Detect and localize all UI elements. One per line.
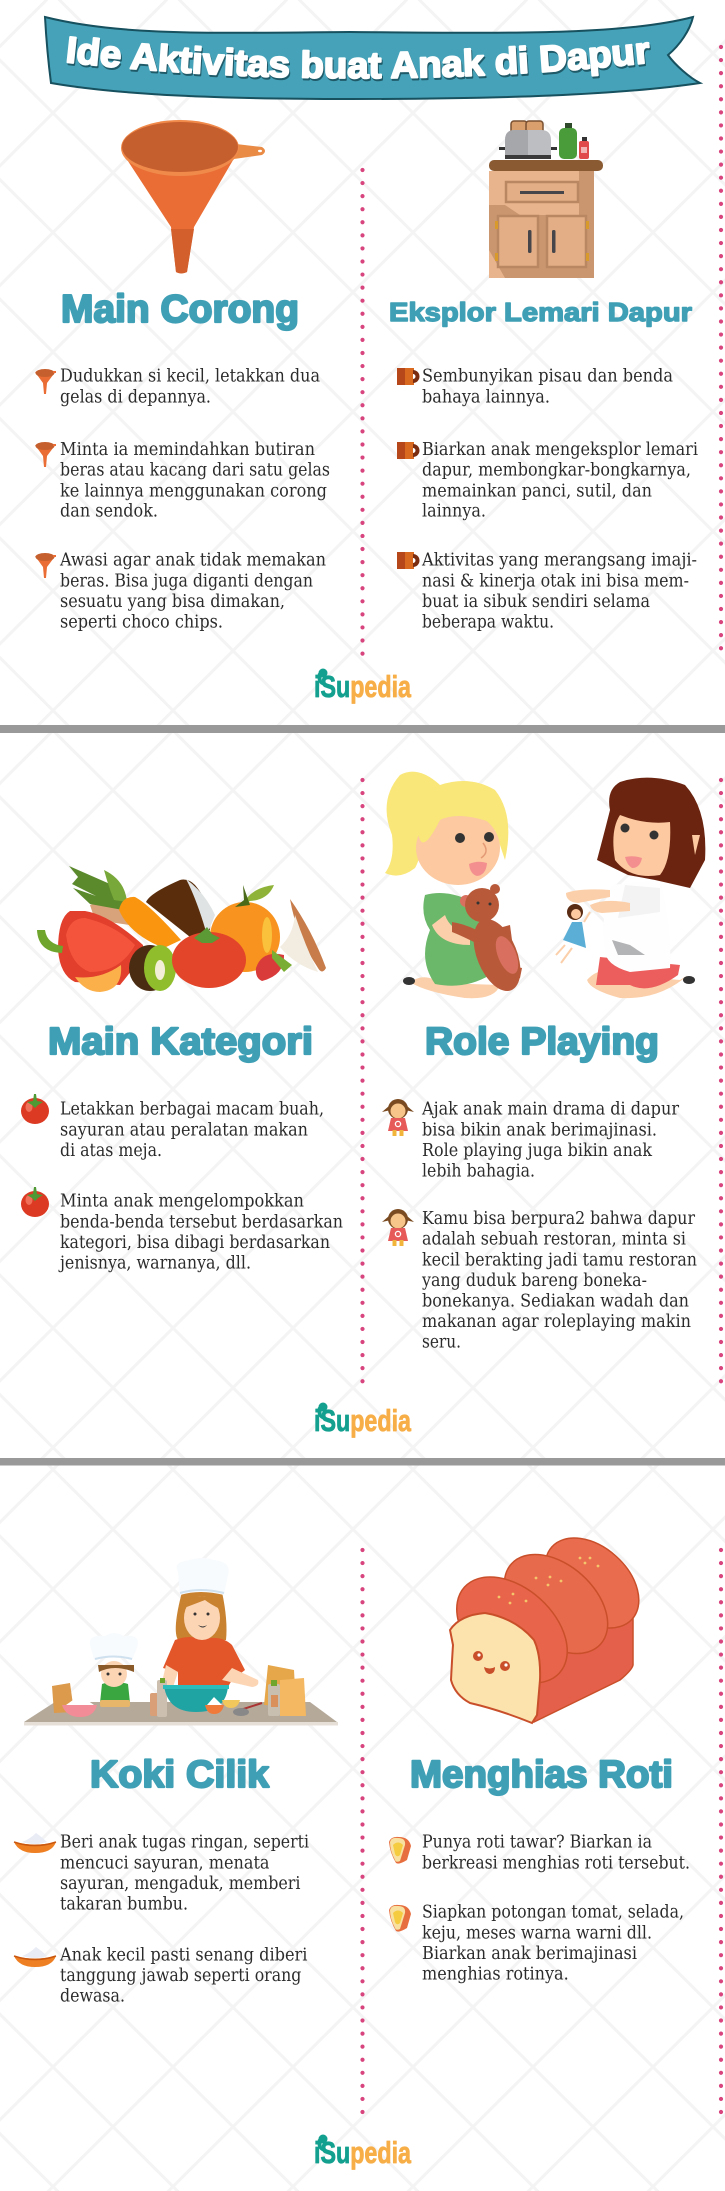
bullet 3: nasi & kinerja otak ini bisa mem- xyxy=(422,571,689,591)
bullet 3: sesuatu yang bisa dimakan, xyxy=(60,592,285,612)
bullet 2: dan sendok. xyxy=(60,502,158,522)
bullet 2: ke lainnya menggunakan corong xyxy=(60,481,327,501)
bullet 1: Role playing juga bikin anak xyxy=(422,1141,652,1161)
bullet 3: Aktivitas yang merangsang imaji- xyxy=(421,551,697,571)
bullet 1: Letakkan berbagai macam buah, xyxy=(60,1100,324,1120)
bullet 2: menghias rotinya. xyxy=(422,1965,569,1985)
heading: Main Kategori: Main Kategori xyxy=(48,1021,313,1063)
bullet 3 xyxy=(397,551,697,632)
background lattice section 3 xyxy=(0,1465,725,2191)
heading: Koki Cilik: Koki Cilik xyxy=(90,1754,270,1796)
bullet 1 xyxy=(397,367,673,407)
bullet 1 xyxy=(21,1094,324,1161)
title banner xyxy=(44,16,704,100)
small doll xyxy=(556,904,590,963)
heading: Main Corong: Main Corong xyxy=(61,288,299,331)
logo: iSupedia section 2: iSupedia xyxy=(314,1403,412,1438)
bullet 2 xyxy=(397,440,698,522)
section separator bar 2 xyxy=(0,1458,725,1466)
bullet 2: seru. xyxy=(422,1333,461,1353)
bullet 3: Awasi agar anak tidak memakan xyxy=(59,551,326,571)
bullet 2: memainkan panci, sutil, dan xyxy=(422,481,652,501)
illustration: funnel xyxy=(121,120,265,274)
bullet 1: bahaya lainnya. xyxy=(422,387,550,407)
bullet 2: bonekanya. Sediakan wadah dan xyxy=(422,1292,689,1312)
panel: Koki Cilik list xyxy=(14,1833,309,2007)
bullet 2: Minta anak mengelompokkan xyxy=(60,1192,304,1212)
bullet 1: di atas meja. xyxy=(60,1141,162,1161)
panel: Menghias Roti list xyxy=(389,1833,690,1985)
bullet 2: dewasa. xyxy=(60,1987,125,2007)
bullet 2: tanggung jawab seperti orang xyxy=(60,1966,301,1986)
bullet 2: jenisnya, warnanya, dll. xyxy=(58,1254,251,1274)
illustration: kitchen cabinet xyxy=(489,121,603,278)
dotted divider: section 2 right xyxy=(719,780,723,1393)
panel: Main Corong list xyxy=(35,367,330,632)
bullet 2: beras atau kacang dari satu gelas xyxy=(60,461,330,481)
bullet 1 xyxy=(389,1833,690,1873)
bullet 2 xyxy=(389,1903,684,1985)
panel: Eksplor Lemari Dapur list xyxy=(397,367,698,632)
bullet 3: beras. Bisa juga diganti dengan xyxy=(60,571,313,591)
child xyxy=(90,1633,138,1703)
bullet 2 xyxy=(21,1187,343,1274)
bullet 1 xyxy=(382,1099,680,1182)
dotted divider: section 3 centre xyxy=(360,1550,365,2125)
background lattice section 1 xyxy=(0,0,725,725)
bullet 1: bisa bikin anak berimajinasi. xyxy=(422,1120,657,1140)
bullet 2: dapur, membongkar-bongkarnya, xyxy=(422,461,691,481)
bullet 1: sayuran atau peralatan makan xyxy=(60,1120,308,1140)
background lattice section 2 xyxy=(0,733,725,1458)
bullet 2: lainnya. xyxy=(422,502,486,522)
bullet 2: Minta ia memindahkan butiran xyxy=(60,440,315,460)
heading: Eksplor Lemari Dapur: Eksplor Lemari Dapur xyxy=(389,297,692,327)
ingredients and bowl xyxy=(52,1665,306,1717)
bullet 2 xyxy=(382,1209,697,1353)
bullet 3: buat ia sibuk sendiri selama xyxy=(422,592,650,612)
bullet 2: makanan agar roleplaying makin xyxy=(422,1312,691,1332)
bullet 1: Sembunyikan pisau dan benda xyxy=(422,367,673,387)
bullet 1: gelas di depannya. xyxy=(60,387,211,407)
heading: Role Playing: Role Playing xyxy=(425,1021,659,1063)
bullet 2: Kamu bisa berpura2 bahwa dapur xyxy=(422,1209,696,1229)
bullet 3: beberapa waktu. xyxy=(422,612,554,632)
bullet 2: benda-benda tersebut berdasarkan xyxy=(60,1212,343,1232)
illustration: mother and child cooking xyxy=(24,1558,338,1726)
bullet 2: kategori, bisa dibagi berdasarkan xyxy=(60,1233,330,1253)
bullet 2: Siapkan potongan tomat, selada, xyxy=(422,1903,684,1923)
bullet 1: takaran bumbu. xyxy=(60,1894,188,1914)
panel: Role Playing list xyxy=(382,1099,697,1353)
bullet 1: mencuci sayuran, menata xyxy=(60,1853,270,1873)
bullet 1: Ajak anak main drama di dapur xyxy=(421,1100,680,1120)
panel: Main Kategori list xyxy=(21,1094,343,1274)
bullet 2: yang duduk bareng boneka- xyxy=(421,1271,647,1291)
teddy bear xyxy=(452,884,530,998)
bullet 3: seperti choco chips. xyxy=(60,612,223,632)
illustration: fruit and vegetable pile xyxy=(37,866,326,992)
bullet 2: adalah sebuah restoran, minta si xyxy=(422,1230,686,1250)
bullet 1 xyxy=(14,1833,309,1914)
bullet 1: sayuran, mengaduk, memberi xyxy=(60,1874,301,1894)
bullet 2: keju, meses warna warni dll. xyxy=(422,1923,652,1943)
bullet 2: Biarkan anak berimajinasi xyxy=(422,1944,637,1964)
title text: Ide Aktivitas buat Anak di Dapur xyxy=(66,36,651,82)
mother xyxy=(162,1558,258,1690)
illustration: bread loaf xyxy=(436,1520,656,1723)
bullet 2 xyxy=(14,1945,308,2007)
logo: iSupedia section 3: iSupedia xyxy=(314,2135,412,2170)
bullet 1: lebih bahagia. xyxy=(422,1162,535,1182)
bullet 2: Anak kecil pasti senang diberi xyxy=(59,1945,308,1965)
illustration: girls playing with bear and doll xyxy=(385,772,705,998)
bullet 2: kecil berakting jadi tamu restoran xyxy=(422,1250,697,1270)
blonde girl xyxy=(385,772,508,998)
dotted divider: section 1 right xyxy=(719,47,723,659)
bullet 1: Beri anak tugas ringan, seperti xyxy=(60,1833,309,1853)
bullet 1: berkreasi menghias roti tersebut. xyxy=(422,1853,690,1873)
bullet 3 xyxy=(35,551,326,632)
section separator bar 1 xyxy=(0,725,725,733)
bullet 1: Dudukkan si kecil, letakkan dua xyxy=(60,367,320,387)
bullet 2: Biarkan anak mengeksplor lemari xyxy=(422,440,698,460)
dotted divider: section 1 centre xyxy=(360,170,365,659)
heading: Menghias Roti: Menghias Roti xyxy=(410,1754,673,1796)
dotted divider: section 2 centre xyxy=(360,780,365,1393)
dotted divider: section 3 right xyxy=(719,1550,723,2125)
bullet 1 xyxy=(35,367,320,407)
brunette girl xyxy=(566,778,705,998)
logo: iSupedia section 1: iSupedia xyxy=(314,669,412,704)
bullet 2 xyxy=(35,440,330,522)
bullet 1: Punya roti tawar? Biarkan ia xyxy=(422,1833,652,1853)
